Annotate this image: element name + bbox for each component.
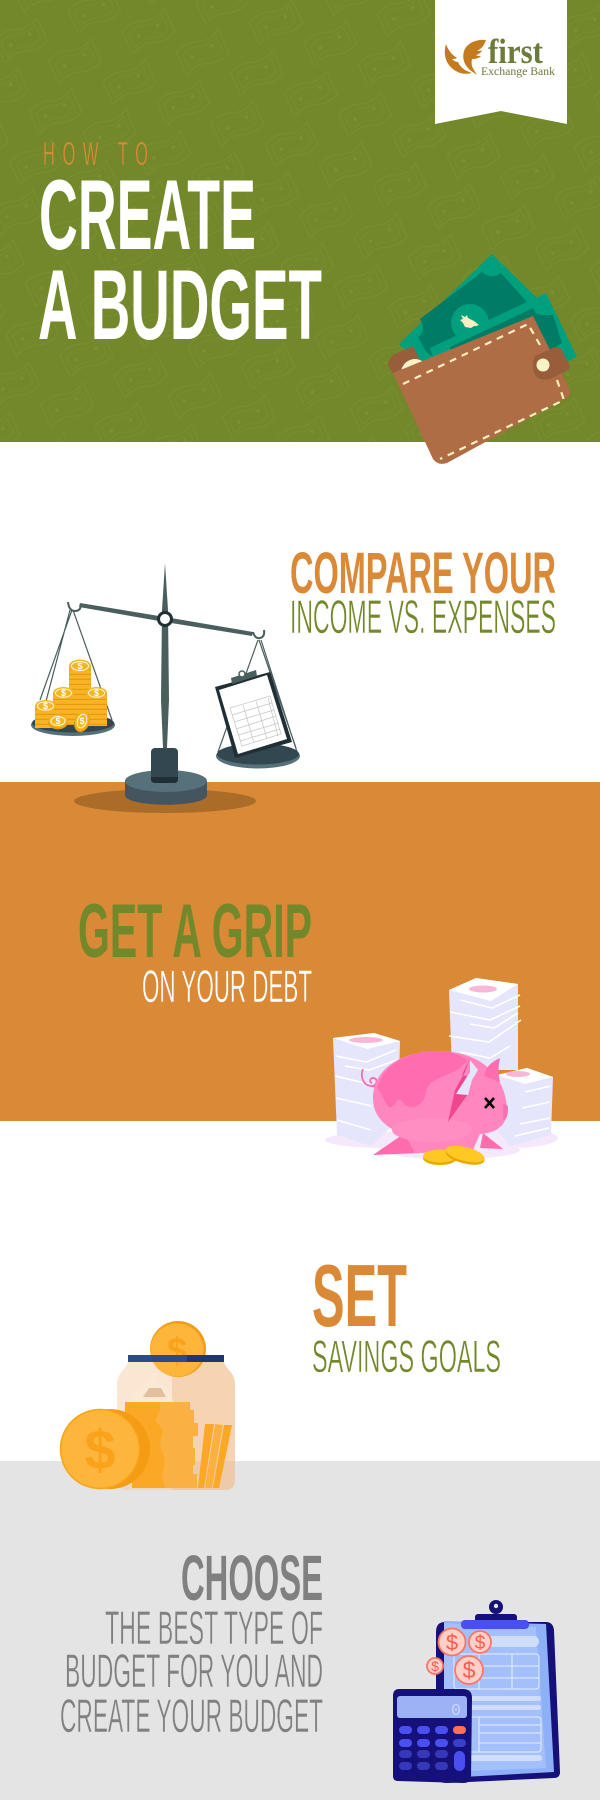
icon: balance scale	[31, 563, 300, 813]
paper stack: right	[497, 1068, 553, 1146]
text: choose body	[60, 1601, 323, 1742]
logo wordmark: first	[488, 32, 543, 71]
panel: gray choose section	[0, 1461, 600, 1800]
paper stack: centre	[449, 978, 521, 1070]
pig tail	[362, 1069, 379, 1089]
icon: wallet with cash	[388, 254, 577, 464]
leaning coins	[198, 1424, 232, 1488]
title: A BUDGET	[38, 249, 322, 360]
title: HOW TO	[43, 135, 148, 173]
dollar coins	[427, 1628, 491, 1684]
pig ear	[484, 1058, 500, 1082]
large coin	[60, 1409, 150, 1489]
panel: orange debt section	[0, 782, 600, 1121]
left pan	[31, 610, 115, 736]
money bag	[130, 1372, 173, 1402]
calculator: 0	[451, 1702, 461, 1721]
heading: get a grip: GET A GRIP	[78, 889, 312, 974]
calculator	[393, 1689, 472, 1783]
pig crack	[448, 1058, 470, 1122]
heading: set: SET	[312, 1246, 407, 1345]
title: CREATE	[39, 159, 256, 270]
heading: get a grip	[78, 889, 312, 1012]
jar lid	[128, 1355, 224, 1362]
icon: savings jar with coins	[60, 1321, 235, 1490]
clipboard	[215, 670, 292, 758]
coin stacks: $	[61, 688, 66, 698]
dollar coins: $	[446, 1630, 458, 1655]
large coin: $	[84, 1418, 116, 1481]
coin stacks: $	[77, 661, 83, 671]
budget tables	[454, 1654, 541, 1752]
gold coins	[423, 1142, 486, 1168]
heading: choose: CHOOSE	[181, 1542, 323, 1614]
coin stacks: $	[43, 701, 48, 711]
pig snout	[503, 1104, 508, 1120]
pig body	[373, 1051, 507, 1153]
coin falling into jar: $	[167, 1330, 187, 1371]
text: THE BEST TYPE OF	[105, 1601, 323, 1654]
icon: budget clipboard and calculator	[393, 1600, 560, 1783]
panel: green header	[0, 0, 600, 442]
coin stacks: $	[55, 716, 61, 726]
heading: compare	[290, 541, 556, 643]
coin stacks: $	[79, 716, 85, 726]
text: ON YOUR DEBT	[142, 961, 312, 1012]
pig feet	[373, 1133, 503, 1155]
dollar coins: $	[431, 1658, 439, 1674]
icon: feather logo	[445, 40, 486, 75]
coin stacks: $	[94, 688, 99, 698]
icon: broken piggy bank with debt papers	[325, 978, 558, 1168]
dead eye	[485, 1098, 494, 1108]
logo ribbon	[435, 0, 567, 124]
heading: set	[312, 1246, 501, 1382]
dollar coins: $	[463, 1657, 476, 1683]
coin falling into jar	[150, 1321, 206, 1377]
coin stacks	[35, 660, 107, 734]
text: CREATE YOUR BUDGET	[60, 1689, 323, 1742]
paper stack: left	[333, 1033, 400, 1146]
text: BUDGET FOR YOU AND	[65, 1644, 323, 1697]
right pan	[216, 640, 300, 768]
coin stack	[125, 1402, 198, 1488]
logo wordmark: Exchange Bank	[481, 64, 555, 78]
title	[38, 135, 322, 360]
dollar coins: $	[475, 1633, 486, 1654]
